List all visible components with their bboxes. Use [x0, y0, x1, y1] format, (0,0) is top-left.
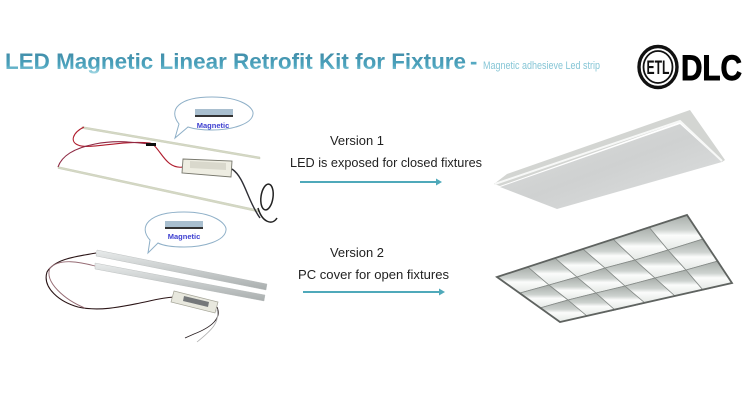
- text: version 1 description: LED is exposed for closed fixtures: [290, 156, 482, 170]
- tube lower: [95, 263, 265, 301]
- fixture frame: [495, 121, 722, 184]
- LED strip lower: [58, 166, 259, 212]
- label: version 1: Version 1: [330, 134, 384, 148]
- output wires: [232, 169, 260, 218]
- arrow: version 1: [300, 178, 442, 186]
- cable coil: [259, 183, 275, 211]
- panel: version 1 kit: [58, 126, 277, 222]
- cable coil lower: [258, 208, 277, 222]
- text: version 2 description: PC cover for open fixtures: [298, 268, 449, 282]
- wires red: [73, 127, 183, 167]
- troffer frame: [497, 215, 732, 322]
- panel: closed fixture: [494, 110, 725, 209]
- driver: [171, 291, 218, 313]
- callout: magnetic upper: [175, 97, 253, 138]
- arrow: version 2: [303, 288, 445, 296]
- connector: [146, 143, 156, 146]
- troffer cells: [497, 215, 732, 322]
- tube upper: [96, 250, 267, 290]
- fixture lens: [500, 124, 722, 209]
- wires to lower strip: [58, 142, 150, 167]
- callout: magnetic upper: Magnetic: [197, 121, 229, 130]
- driver: [182, 159, 232, 177]
- fixture housing: [494, 110, 725, 186]
- icon: ETL listed mark: [639, 46, 677, 88]
- output wires: [185, 307, 218, 338]
- wires: [46, 253, 174, 309]
- title: LED Magnetic Linear Retrofit Kit for Fixture: [5, 49, 466, 74]
- subtitle: Magnetic adhesieve Led strip: [483, 60, 600, 72]
- label on driver: [183, 296, 209, 307]
- panel: open troffer fixture: [497, 215, 732, 322]
- title: -: [470, 49, 477, 74]
- driver label: [190, 161, 226, 170]
- LED strip upper: [82, 126, 260, 159]
- output wire pale: [197, 310, 218, 342]
- wires pale: [49, 262, 95, 308]
- callout: magnetic lower: Magnetic: [168, 232, 200, 241]
- icon: ETL listed mark: ETL: [646, 58, 670, 79]
- panel: version 2 kit: [46, 250, 267, 342]
- label: version 2: Version 2: [330, 246, 384, 260]
- callout: magnetic lower: [145, 212, 226, 253]
